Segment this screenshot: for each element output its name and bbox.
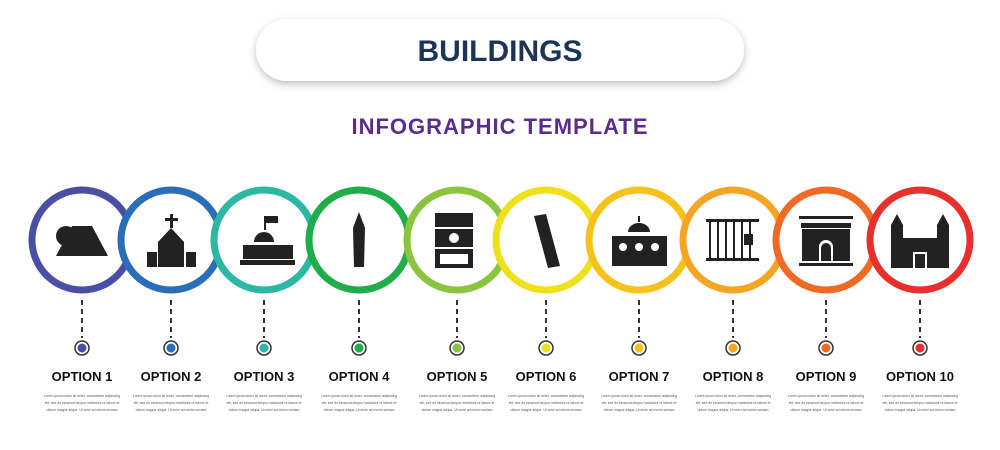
option 8 [683, 190, 783, 412]
option 2: elit, sed do eiusmod tempor incididunt ut labore et [134, 401, 208, 405]
option 6: dolore magna aliqua. Ut enim ad minim veniam [511, 408, 582, 412]
option 9: OPTION 9 [796, 369, 856, 384]
option 7: elit, sed do eiusmod tempor incididunt ut labore et [602, 401, 676, 405]
option 4: elit, sed do eiusmod tempor incididunt ut labore et [322, 401, 396, 405]
option 8: Lorem ipsum dolor sit amet, consectetur adipiscing [695, 394, 771, 398]
icon: building [435, 213, 473, 268]
option 6: elit, sed do eiusmod tempor incididunt ut labore et [509, 401, 583, 405]
option 2 [121, 190, 221, 412]
icon: leaning tower [534, 214, 560, 268]
option 4 [309, 190, 409, 412]
icon: domed hall [612, 216, 667, 266]
option 5: OPTION 5 [427, 369, 487, 384]
title pill [256, 19, 744, 81]
option 5: dolore magna aliqua. Ut enim ad minim veniam [422, 408, 493, 412]
icon: mountain [56, 226, 108, 256]
option 5: Lorem ipsum dolor sit amet, consectetur adipiscing [419, 394, 495, 398]
option 2: Lorem ipsum dolor sit amet, consectetur adipiscing [133, 394, 209, 398]
option 3: elit, sed do eiusmod tempor incididunt ut labore et [227, 401, 301, 405]
option 8: dolore magna aliqua. Ut enim ad minim veniam [698, 408, 769, 412]
option 8: OPTION 8 [703, 369, 763, 384]
option 9: dolore magna aliqua. Ut enim ad minim veniam [791, 408, 862, 412]
option 5: elit, sed do eiusmod tempor incididunt ut labore et [420, 401, 494, 405]
option 6: OPTION 6 [516, 369, 576, 384]
option 10: dolore magna aliqua. Ut enim ad minim veniam [885, 408, 956, 412]
icon: jail [706, 219, 759, 261]
icon: tower [353, 212, 365, 267]
icon: castle [891, 214, 949, 268]
option 2: dolore magna aliqua. Ut enim ad minim veniam [136, 408, 207, 412]
option 10: elit, sed do eiusmod tempor incididunt ut labore et [883, 401, 957, 405]
option 10: OPTION 10 [886, 369, 954, 384]
option 9: Lorem ipsum dolor sit amet, consectetur adipiscing [788, 394, 864, 398]
option 1: elit, sed do eiusmod tempor incididunt ut labore et [45, 401, 119, 405]
option 7: OPTION 7 [609, 369, 669, 384]
icon: capitol [240, 216, 295, 265]
option 7: dolore magna aliqua. Ut enim ad minim veniam [604, 408, 675, 412]
option 3 [214, 190, 314, 412]
title pill: BUILDINGS [418, 35, 582, 68]
option 9 [776, 190, 876, 412]
option 1: dolore magna aliqua. Ut enim ad minim veniam [47, 408, 118, 412]
option 4: OPTION 4 [329, 369, 390, 384]
icon: church [147, 214, 196, 267]
option 8: elit, sed do eiusmod tempor incididunt ut labore et [696, 401, 770, 405]
option 5 [407, 190, 507, 412]
option 3: dolore magna aliqua. Ut enim ad minim veniam [229, 408, 300, 412]
option 2: OPTION 2 [141, 369, 201, 384]
option 4: Lorem ipsum dolor sit amet, consectetur adipiscing [321, 394, 397, 398]
icon: arch [799, 216, 853, 266]
subtitle: INFOGRAPHIC TEMPLATE [351, 114, 649, 139]
option 10: Lorem ipsum dolor sit amet, consectetur adipiscing [882, 394, 958, 398]
option 7 [589, 190, 689, 412]
option 10 [870, 190, 970, 412]
option 3: OPTION 3 [234, 369, 294, 384]
option 1: Lorem ipsum dolor sit amet, consectetur adipiscing [44, 394, 120, 398]
option 1 [32, 190, 132, 412]
option 6 [496, 190, 596, 412]
option 6: Lorem ipsum dolor sit amet, consectetur adipiscing [508, 394, 584, 398]
option 3: Lorem ipsum dolor sit amet, consectetur adipiscing [226, 394, 302, 398]
option 4: dolore magna aliqua. Ut enim ad minim veniam [324, 408, 395, 412]
option 7: Lorem ipsum dolor sit amet, consectetur adipiscing [601, 394, 677, 398]
option 9: elit, sed do eiusmod tempor incididunt ut labore et [789, 401, 863, 405]
option 1: OPTION 1 [52, 369, 112, 384]
